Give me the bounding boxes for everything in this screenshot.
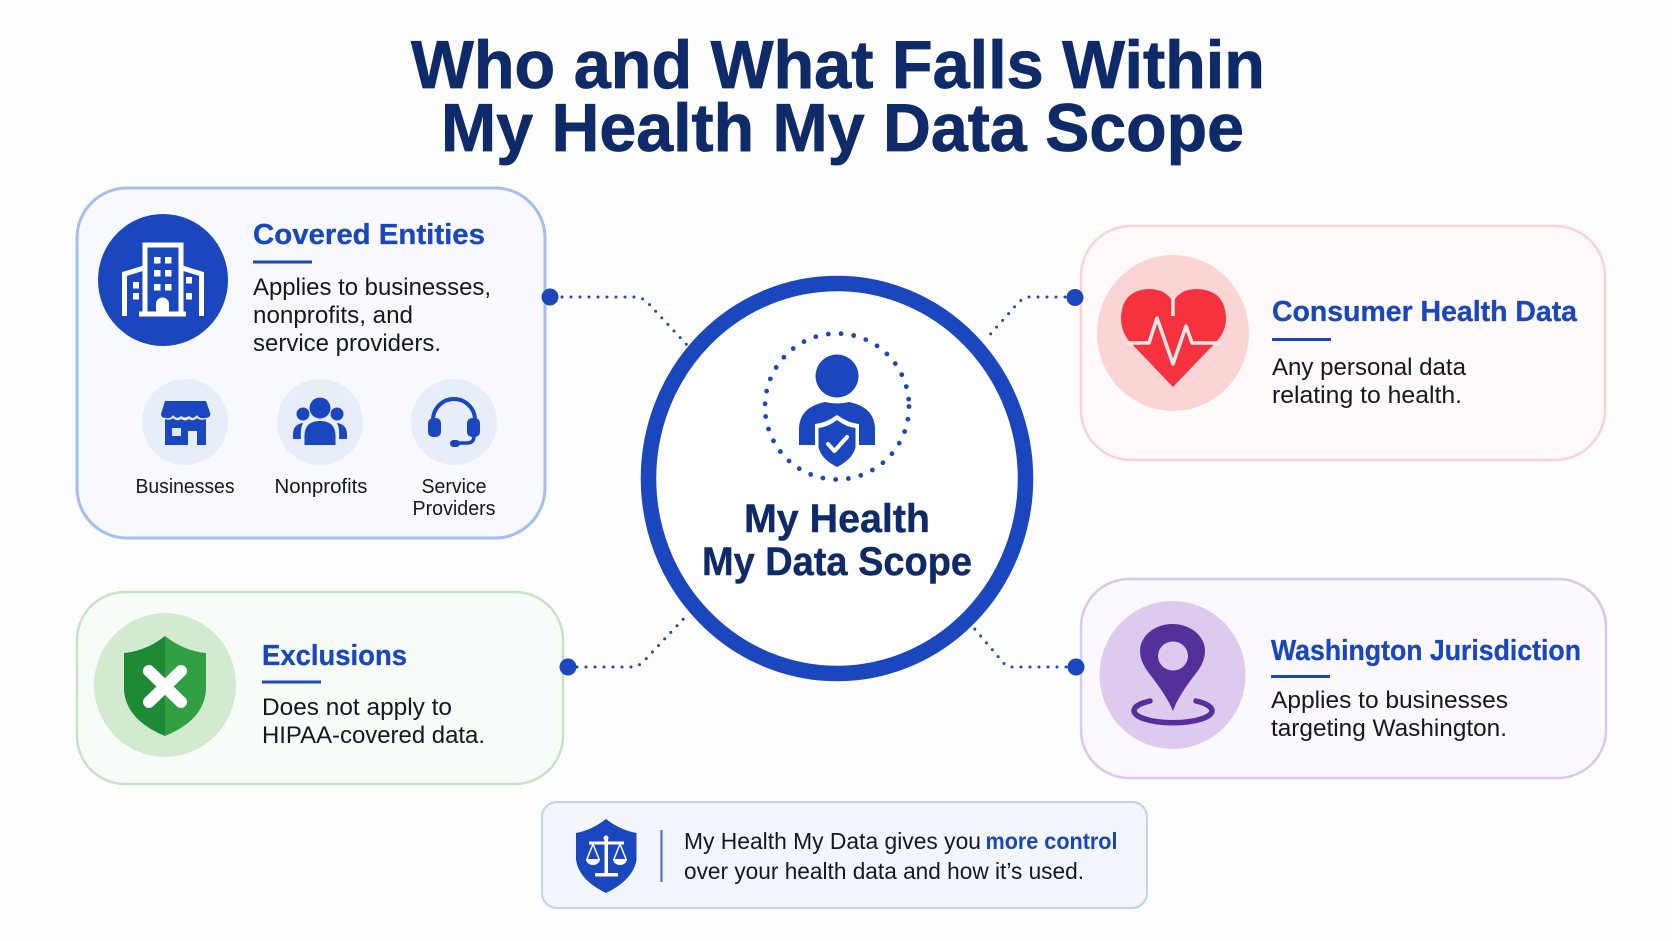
- icon: service providers: [411, 379, 497, 465]
- text: exclusions description: Does not apply to: [262, 694, 452, 721]
- icon: nonprofits: [277, 379, 363, 465]
- text: washington jurisdiction description: targeting Washington.: [1271, 715, 1507, 742]
- connector dots: [542, 288, 1084, 676]
- icon: location pin: [1100, 601, 1246, 749]
- callout: bottom note: [542, 802, 1147, 908]
- text: covered entities description: nonprofits, and: [253, 302, 413, 329]
- icon: shield with scales: [576, 819, 636, 893]
- heading: covered entities: Covered Entities: [253, 219, 485, 251]
- icon: heart: [1097, 255, 1249, 411]
- title: Who and What Falls Within: [411, 27, 1265, 103]
- label: nonprofits: Nonprofits: [274, 476, 368, 498]
- callout text: My Health My Data gives you: [684, 828, 981, 854]
- label: businesses: Businesses: [136, 476, 234, 498]
- heading: washington jurisdiction: Washington Jurisdiction: [1271, 635, 1581, 667]
- icon: businesses: [142, 379, 228, 465]
- text: exclusions description: [262, 694, 485, 749]
- dotted ring: [765, 334, 909, 480]
- central circle: [648, 284, 1026, 674]
- callout text: over your health data and how it’s used.: [684, 858, 1084, 884]
- connector lines: [562, 297, 1066, 667]
- label: service providers: Providers: [412, 498, 496, 520]
- callout text: more control: [986, 828, 1118, 854]
- panel: exclusions: [77, 592, 563, 784]
- central label: My Health: [744, 497, 930, 541]
- callout text: [684, 828, 1118, 884]
- text: consumer health data description: [1272, 354, 1467, 409]
- icon: person with shield: [799, 354, 875, 471]
- title: [411, 27, 1265, 166]
- heading: consumer health data: Consumer Health Data: [1272, 296, 1578, 328]
- label: service providers: [412, 476, 496, 520]
- panel: covered entities: [77, 188, 545, 538]
- text: consumer health data description: relating to health.: [1272, 382, 1462, 409]
- title: My Health My Data Scope: [441, 90, 1244, 166]
- text: washington jurisdiction description: Applies to businesses: [1271, 687, 1508, 714]
- text: consumer health data description: Any personal data: [1272, 354, 1467, 381]
- panel: washington jurisdiction: [1081, 579, 1606, 778]
- icon: shield with x: [94, 613, 236, 757]
- label: service providers: Service: [422, 476, 486, 498]
- panel: consumer health data: [1081, 226, 1605, 460]
- heading: exclusions: Exclusions: [262, 640, 407, 672]
- text: exclusions description: HIPAA-covered data.: [262, 722, 485, 749]
- central label: [702, 497, 972, 584]
- central label: My Data Scope: [702, 540, 972, 584]
- text: washington jurisdiction description: [1271, 687, 1508, 742]
- text: covered entities description: service providers.: [253, 330, 441, 357]
- text: covered entities description: Applies to businesses,: [253, 274, 491, 301]
- icon: building: [98, 214, 228, 346]
- text: covered entities description: [253, 274, 491, 357]
